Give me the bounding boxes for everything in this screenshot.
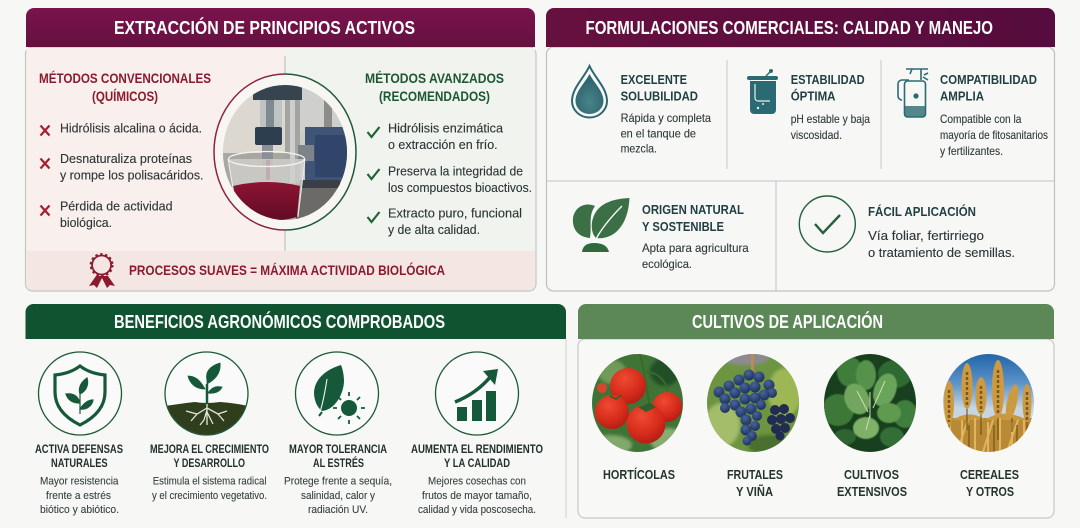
header bar: EXTRACCIÓN DE PRINCIPIOS ACTIVOS [114, 17, 415, 38]
item: fácil aplicación [799, 196, 1015, 260]
benefit: tolerancia [284, 352, 392, 516]
benefit: crecimiento: y el crecimiento vegetativo. [152, 490, 267, 502]
panel: beneficios agronómicos [26, 304, 566, 518]
item: solubilidad: en el tanque de [621, 126, 696, 140]
panel: formulaciones comerciales [546, 8, 1055, 291]
photo: leafy crop [822, 352, 918, 454]
crop: cereales y otros: CEREALES [960, 467, 1019, 482]
header bar: CULTIVOS DE APLICACIÓN [692, 311, 883, 332]
header bar: BENEFICIOS AGRONÓMICOS COMPROBADOS [114, 311, 445, 332]
crop: hortícolas [592, 354, 683, 479]
item: solubilidad: EXCELENTE [621, 72, 687, 87]
crop: hortícolas: HORTÍCOLAS [603, 467, 675, 482]
header bar [578, 304, 1054, 339]
item: origen natural: ORIGEN NATURAL [642, 202, 744, 217]
icon: plant with roots [165, 352, 248, 436]
advanced methods list: Hidrólisis enzimática [388, 121, 504, 136]
item: origen natural: ecológica. [642, 257, 692, 271]
header bar [26, 304, 566, 339]
benefit: crecimiento: MEJORA EL CRECIMIENTO [150, 444, 269, 456]
benefit: crecimiento: Y DESARROLLO [174, 458, 245, 470]
item: solubilidad: SOLUBILIDAD [621, 89, 698, 104]
icon: beaker [747, 69, 778, 114]
conventional methods list: biológica. [60, 215, 112, 230]
item: solubilidad [572, 66, 711, 156]
icon: leaf sprout [573, 198, 630, 252]
benefit: rendimiento: Mejores cosechas con [428, 476, 526, 488]
photo: tomatoes [592, 354, 683, 452]
advanced methods list: Preserva la integridad de [388, 164, 523, 178]
advanced methods list [368, 121, 532, 237]
crop: cereales y otros: Y OTROS [966, 484, 1014, 499]
benefit: tolerancia: salinidad, calor y [301, 490, 375, 502]
item: origen natural: Apta para agricultura [642, 241, 749, 255]
panel: cultivos de aplicación [578, 304, 1054, 518]
benefit: defensas: ACTIVA DEFENSAS [35, 444, 123, 456]
crop: cereales y otros [941, 352, 1037, 499]
item: compatibilidad: Compatible con la [940, 112, 1022, 126]
item: compatibilidad: y fertilizantes. [940, 144, 1003, 158]
conventional methods list: Desnaturaliza proteínas [60, 151, 192, 166]
benefit: defensas [35, 352, 123, 516]
benefit: rendimiento [411, 352, 543, 516]
benefit: rendimiento: AUMENTA EL RENDIMIENTO [411, 444, 543, 456]
benefit: tolerancia: radiación UV. [308, 504, 368, 516]
item: origen natural: Y SOSTENIBLE [642, 219, 724, 234]
benefit: defensas: biótico y abiótico. [40, 504, 119, 516]
item: compatibilidad: mayoría de fitosanitarios [940, 128, 1048, 142]
conventional methods list: y rompe los polisacáridos. [60, 168, 204, 182]
crop: frutales y viña: FRUTALES [727, 467, 783, 482]
summary line: PROCESOS SUAVES = MÁXIMA ACTIVIDAD BIOLÓGICA [129, 261, 445, 278]
advanced methods heading: (RECOMENDADOS) [379, 88, 490, 104]
item: fácil aplicación: Vía foliar, fertirriego [868, 228, 984, 243]
benefit: tolerancia: MAYOR TOLERANCIA [289, 444, 387, 456]
photo: wheat [941, 352, 1037, 455]
conventional methods list: Hidrólisis alcalina o ácida. [60, 121, 202, 136]
item: estabilidad: viscosidad. [791, 128, 842, 142]
item: estabilidad: pH estable y baja [791, 112, 870, 126]
item: compatibilidad: AMPLIA [940, 89, 985, 104]
item: solubilidad: mezcla. [621, 142, 657, 156]
icon: shield with plant [38, 352, 122, 435]
item: compatibilidad [898, 69, 1048, 158]
crop: cultivos extensivos: EXTENSIVOS [837, 484, 907, 499]
item: estabilidad: ESTABILIDAD [791, 72, 865, 87]
advanced methods list: o extracción en frío. [388, 137, 498, 152]
advanced methods heading [365, 70, 504, 104]
advanced methods list: los compuestos bioactivos. [388, 180, 532, 195]
benefit: defensas: NATURALES [51, 458, 108, 470]
benefit: defensas: frente a estrés [46, 490, 111, 502]
conventional methods list [40, 121, 204, 230]
icon: leaf and sun [296, 352, 378, 435]
conventional methods heading: (QUÍMICOS) [92, 88, 158, 104]
crop: frutales y viña: Y VIÑA [736, 484, 774, 499]
photo: extraction equipment with red liquid [214, 74, 356, 230]
benefit: rendimiento: frutos de mayor tamaño, [422, 490, 532, 502]
benefit: defensas: Mayor resistencia [40, 476, 119, 488]
header bar [546, 8, 1055, 47]
conventional methods list: Pérdida de actividad [60, 198, 172, 214]
benefit: tolerancia: AL ESTRÉS [313, 457, 364, 470]
header bar [26, 8, 535, 47]
header bar: FORMULACIONES COMERCIALES: CALIDAD Y MANEJO [586, 18, 993, 38]
item: compatibilidad: COMPATIBILIDAD [940, 72, 1037, 87]
item: estabilidad: ÓPTIMA [791, 89, 836, 104]
icon: rising bar chart [436, 352, 518, 435]
conventional methods heading [39, 70, 211, 104]
item: fácil aplicación: FÁCIL APLICACIÓN [868, 204, 976, 219]
benefit: rendimiento: calidad y vida poscosecha. [418, 504, 536, 516]
item: solubilidad: Rápida y completa [621, 111, 711, 125]
advanced methods list: Extracto puro, funcional [388, 206, 522, 220]
benefit: crecimiento: Estimula el sistema radical [153, 476, 266, 488]
crop: cultivos extensivos [822, 352, 918, 499]
crop: frutales y viña [704, 351, 802, 499]
item: estabilidad [747, 69, 870, 142]
item: fácil aplicación: o tratamiento de semillas. [868, 245, 1015, 260]
icon: spray bottle [898, 69, 928, 117]
photo: grapes [707, 354, 799, 452]
icon: water drop [572, 66, 607, 118]
advanced methods heading: MÉTODOS AVANZADOS [365, 70, 504, 86]
item: origen natural [573, 198, 749, 271]
benefit: crecimiento [150, 352, 269, 502]
advanced methods list: y de alta calidad. [388, 222, 480, 237]
icon: rosette [89, 254, 115, 288]
icon: check in circle [799, 196, 855, 252]
conventional methods heading: MÉTODOS CONVENCIONALES [39, 70, 211, 86]
benefit: tolerancia: Protege frente a sequía, [284, 476, 392, 488]
benefit: rendimiento: Y LA CALIDAD [444, 458, 510, 470]
crop: cultivos extensivos: CULTIVOS [844, 467, 899, 482]
panel: extracción de principios activos [26, 8, 536, 291]
